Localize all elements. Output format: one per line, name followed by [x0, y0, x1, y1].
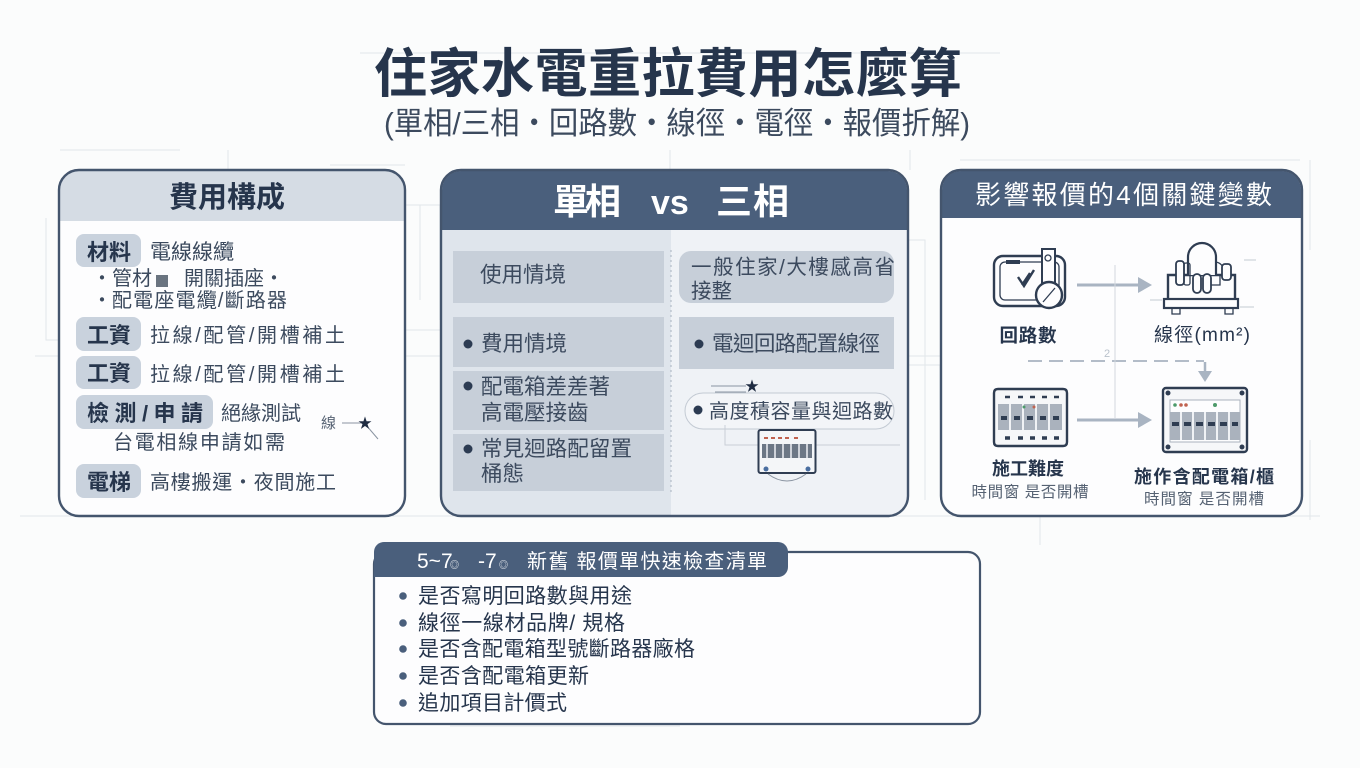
- row: usage right: 一般住家/大樓感高省: [691, 256, 895, 279]
- row: materials: [76, 234, 287, 312]
- row: materials: ・: [92, 290, 112, 312]
- icon: star connector: 線: [321, 415, 336, 432]
- panel: four key variables: [941, 170, 1302, 516]
- row: materials: 開關插座・: [184, 267, 284, 290]
- row: panel difference: [453, 371, 664, 430]
- checklist items: [399, 585, 695, 715]
- panel: quote checklist: [374, 542, 980, 724]
- row: usage right: [679, 251, 895, 303]
- icon: breaker box: [725, 425, 900, 481]
- row: materials: 電線線纜: [150, 241, 234, 264]
- panel: single phase vs three phase: [441, 170, 908, 516]
- panel: single phase vs three phase: 三相: [716, 181, 789, 222]
- heading: four key variables: 影響報價的4個關鍵變數: [975, 180, 1272, 210]
- label: panel upgrade: 施作含配電箱/櫃: [1134, 466, 1274, 487]
- row: common circuits: 桶態: [481, 462, 524, 486]
- row: labor 2: 工資: [87, 361, 131, 386]
- title: 住家水電重拉費用怎麼算: [374, 45, 962, 104]
- row: materials: ・: [92, 268, 112, 290]
- label: circuit count: 回路數: [1000, 325, 1057, 346]
- icon: star connector: ★: [358, 415, 372, 431]
- row: materials: 材料: [87, 240, 131, 265]
- arrow: dashed connector: [1028, 265, 1212, 418]
- panel: single phase vs three phase: vs: [651, 184, 689, 222]
- icon: breaker module: [994, 389, 1067, 446]
- panel: cost structure: [59, 170, 405, 516]
- row: labor 2: 拉線/配管/開槽補土: [150, 363, 345, 386]
- row: other: [76, 464, 336, 498]
- row: usage right: 接整: [691, 280, 732, 303]
- checklist items: 是否含配電箱型號斷路器廠格: [418, 638, 695, 661]
- row: usage left: 使用情境: [480, 263, 566, 287]
- row: cost left: [453, 317, 664, 367]
- heading: single vs three: 單相: [553, 181, 621, 222]
- label: construction difficulty: 施工難度: [992, 459, 1064, 479]
- row: usage left: [453, 251, 664, 303]
- icon: circuit count: [994, 249, 1065, 308]
- label: construction difficulty: 時間窗 是否開槽: [972, 483, 1088, 501]
- row: common circuits: [453, 434, 664, 491]
- icon: star connector: [711, 378, 759, 394]
- heading tab: quote checklist: ◎: [499, 560, 508, 570]
- row: cost right: [679, 317, 894, 369]
- row: common circuits: 常見迴路配留置: [481, 437, 632, 461]
- heading tab: quote checklist: 新舊 報價單快速檢查清單: [527, 550, 767, 573]
- heading: cost structure: 費用構成: [169, 181, 285, 214]
- arrow: dashed connector: 2: [1104, 348, 1110, 360]
- heading tab: quote checklist: 5~7: [417, 550, 453, 573]
- row: panel difference: 配電箱差差著: [481, 375, 610, 399]
- row: labor 1: 拉線/配管/開槽補土: [150, 324, 345, 347]
- checklist items: 是否含配電箱更新: [418, 665, 589, 688]
- row: labor 1: 工資: [87, 323, 131, 348]
- row: inspection and application: 檢測/申請: [87, 401, 203, 426]
- icon: distribution panel: [1163, 388, 1247, 452]
- checklist items: 線徑一線材品牌/ 規格: [418, 612, 625, 635]
- row: inspection and application: [76, 395, 301, 454]
- icon: star connector: [321, 415, 378, 439]
- label: wire gauge: 線徑(mm²): [1154, 324, 1250, 346]
- row: capacity pill: 高度積容量與迴路數: [709, 400, 893, 423]
- icon: wire gauge: [1150, 243, 1256, 314]
- row: inspection and application: 台電相線申請如需: [113, 431, 285, 454]
- label: panel upgrade: 時間窗 是否開槽: [1144, 490, 1264, 508]
- row: capacity pill: [685, 393, 894, 429]
- row: other: 高樓搬運・夜間施工: [150, 471, 336, 494]
- row: inspection and application: 絕緣測試: [221, 402, 301, 425]
- subtitle: (單相/三相・回路數・線徑・電徑・報價折解): [384, 106, 970, 141]
- heading tab: quote checklist: [374, 542, 788, 577]
- arrow: circuit to wire: [1077, 277, 1152, 293]
- row: cost right: 電迴回路配置線徑: [712, 332, 880, 356]
- row: labor 2: [76, 356, 345, 389]
- heading tab: quote checklist: -7: [478, 550, 497, 573]
- row: materials: 管材: [112, 267, 152, 290]
- row: materials: 配電座電纜/斷路器: [112, 289, 287, 312]
- row: panel difference: 高電壓接齒: [481, 401, 589, 425]
- icon: star connector: ★: [745, 378, 759, 394]
- label: construction difficulty: [972, 459, 1088, 501]
- row: cost left: 費用情境: [481, 332, 567, 356]
- heading tab: quote checklist: ◎: [450, 560, 459, 570]
- checklist items: 是否寫明回路數與用途: [418, 585, 632, 608]
- checklist items: 追加項目計價式: [418, 692, 567, 715]
- row: labor 1: [76, 317, 345, 351]
- row: other: 電梯: [87, 470, 131, 495]
- label: panel upgrade: [1134, 466, 1274, 508]
- arrow: breaker to panel: [1077, 412, 1152, 428]
